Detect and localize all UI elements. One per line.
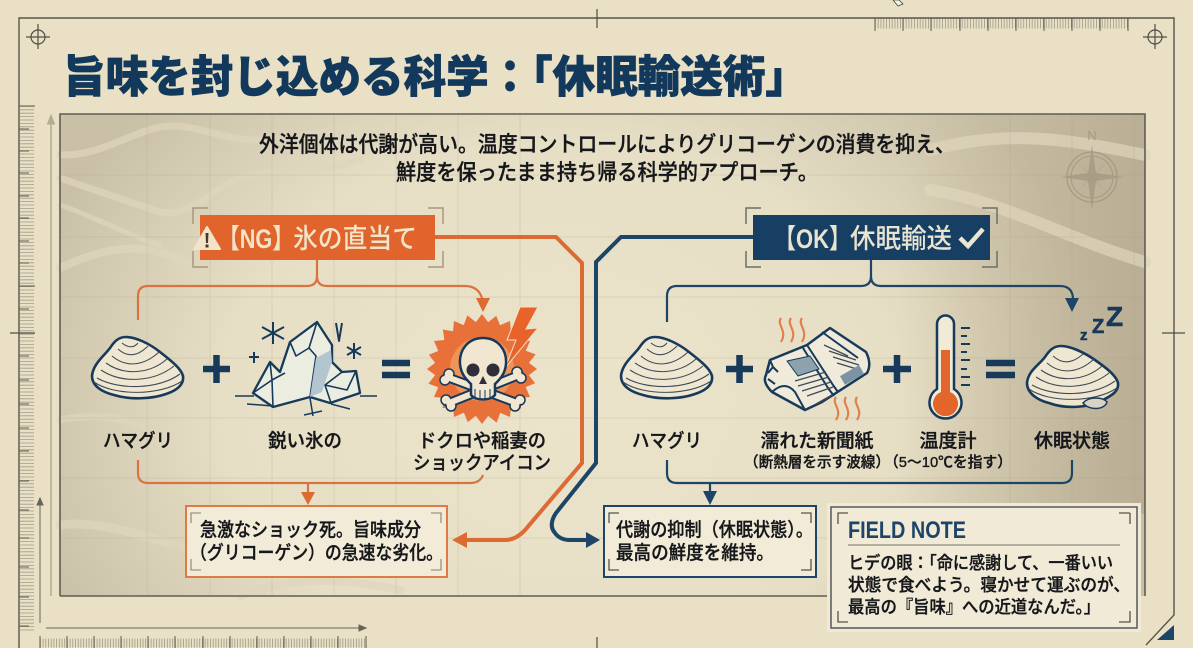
OK labels: ハマグリ [632, 430, 702, 452]
plus [726, 355, 753, 383]
icon: clam (NG) [92, 337, 183, 398]
icon: sleeping clam: Z [1106, 301, 1123, 332]
compass rose: N [1087, 128, 1097, 143]
NG lower bracket [138, 460, 483, 505]
cursor [893, 0, 903, 6]
bottom ruler [40, 636, 366, 648]
equals [382, 363, 410, 375]
OK labels: 濡れた新聞紙 [760, 430, 874, 452]
OK labels: （断熱層を示す波線） [744, 454, 890, 471]
OK header: 休眠輸送 [850, 224, 952, 254]
corner triangle [1157, 625, 1174, 640]
NG labels: ハマグリ [103, 430, 173, 452]
NG header [193, 208, 443, 267]
OK header [746, 208, 997, 267]
icon: sleeping clam [1027, 301, 1123, 409]
arrow: OK route [552, 237, 753, 548]
plus [203, 355, 230, 383]
NG result box: 急激なショック死。旨味成分 [200, 519, 421, 541]
icon: thermometer [930, 316, 970, 419]
field note: 最高の『旨味』への近道なんだ。」 [848, 597, 1100, 617]
icon: warning [194, 227, 220, 249]
OK labels: 温度計 [920, 430, 976, 452]
OK lower bracket [667, 460, 1072, 505]
top ruler [875, 18, 1128, 31]
field note: ヒデの眼：「命に感謝して、一番いい [848, 553, 1113, 573]
measure arrows [37, 115, 366, 631]
field note: FIELD NOTE [848, 517, 966, 544]
icon: skull shock [415, 302, 549, 436]
compass rose [1061, 128, 1124, 210]
field note [827, 503, 1141, 632]
intro text [259, 132, 955, 185]
NG labels: ドクロや稲妻の [418, 430, 546, 452]
OK result box [604, 506, 816, 577]
NG header: 【NG】 [218, 224, 294, 254]
icon: sleeping clam: Z [1092, 316, 1104, 338]
NG labels: 鋭い氷の [268, 430, 342, 452]
NG top bracket [138, 260, 490, 320]
map panel [60, 114, 1145, 596]
OK result box: 最高の鮮度を維持。 [616, 542, 774, 564]
icon: check [960, 229, 983, 246]
icon: ice [235, 322, 377, 416]
field note: 状態で食べよう。寝かせて運ぶのが、 [848, 575, 1130, 595]
OK labels [632, 430, 1110, 471]
intro text: 鮮度を保ったまま持ち帰る科学的アプローチ。 [396, 160, 818, 185]
icon: clam (OK) [621, 337, 712, 398]
NG labels [103, 430, 551, 474]
OK result box: 代謝の抑制（休眠状態）。 [616, 519, 813, 541]
OK top bracket [667, 260, 1079, 322]
OK labels: （5～10℃を指す） [884, 454, 1012, 471]
NG header: 氷の直当て [293, 224, 417, 254]
NG labels: ショックアイコン [413, 452, 551, 474]
intro text: 外洋個体は代謝が高い。温度コントロールによりグリコーゲンの消費を抑え、 [259, 132, 955, 157]
icon: sleeping clam: z [1080, 327, 1088, 344]
NG result box [186, 506, 447, 577]
equals [986, 363, 1015, 375]
OK labels: 休眠状態 [1034, 430, 1110, 452]
NG result box: （グリコーゲン）の急速な劣化。 [190, 542, 443, 564]
left ruler [19, 106, 35, 632]
OK header: 【OK】 [774, 224, 851, 254]
icon: wet newspaper [765, 318, 869, 420]
arrow: NG route [435, 237, 582, 548]
plus [883, 355, 911, 383]
title: 旨味を封じ込める科学：「休眠輸送術」 [63, 53, 808, 102]
